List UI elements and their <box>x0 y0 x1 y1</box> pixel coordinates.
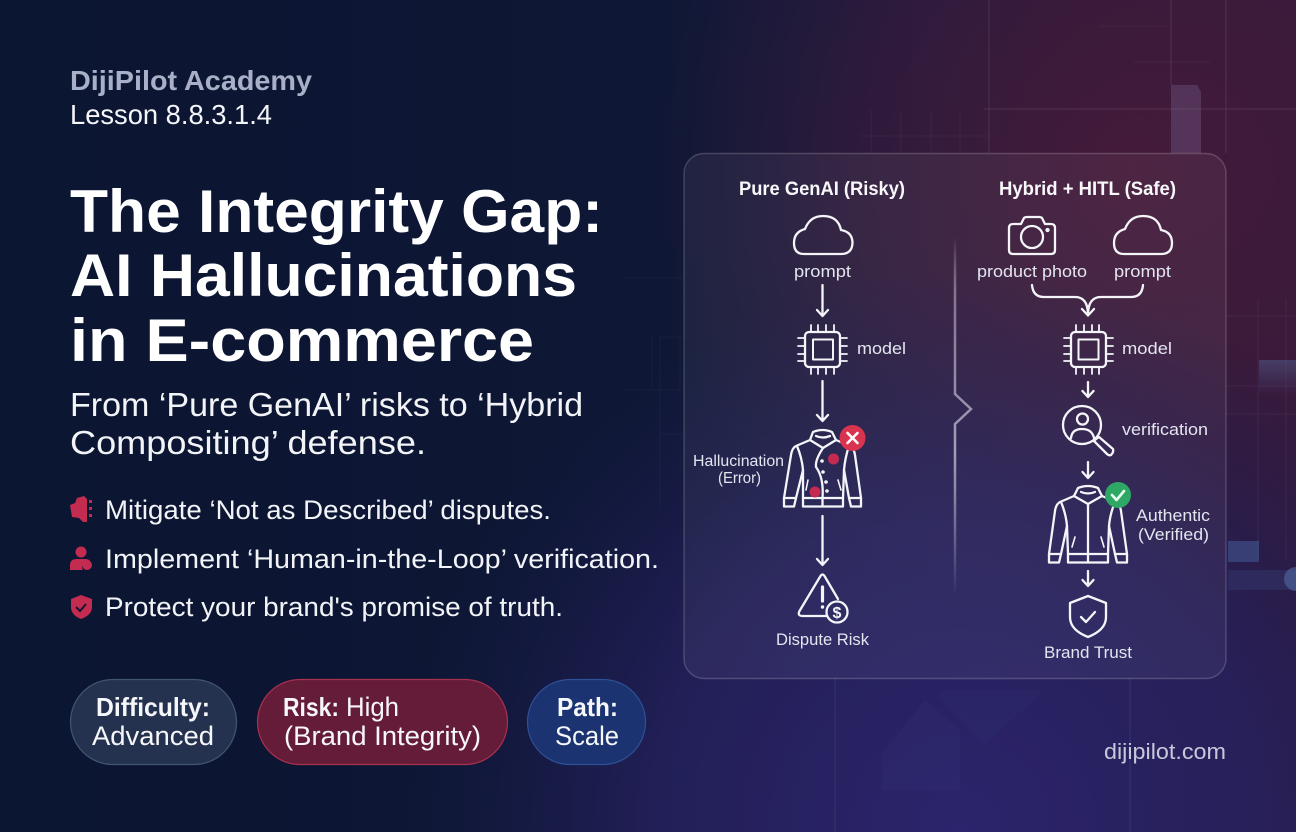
label: prompt: prompt <box>1114 262 1171 281</box>
title: The Integrity Gap: <box>70 178 603 245</box>
label: authentic: (Verified) <box>1138 525 1209 544</box>
arrow <box>817 285 828 316</box>
label: hallucination: Hallucination <box>693 453 784 470</box>
bullet: brand promise: Protect your brand's promise of truth. <box>105 592 563 622</box>
pill: difficulty: Advanced <box>92 721 214 751</box>
label: dispute risk: Dispute Risk <box>776 630 869 649</box>
label: prompt: prompt <box>794 262 851 281</box>
column: pure genai <box>693 178 906 649</box>
arrow <box>817 516 828 565</box>
pill: difficulty: Difficulty: <box>96 692 210 722</box>
icon: flawed jacket <box>784 425 866 506</box>
title: in E-commerce <box>70 307 534 374</box>
icon: cloud <box>1114 216 1172 254</box>
icon: chip <box>1064 325 1113 374</box>
icon: verification magnifier <box>1063 406 1113 455</box>
subtitle: From ‘Pure GenAI’ risks to ‘Hybrid <box>70 386 583 423</box>
arrow <box>1082 462 1094 478</box>
label: product photo: product photo <box>977 262 1087 281</box>
arrow: merge bracket <box>1032 285 1143 316</box>
title <box>70 178 603 374</box>
arrow <box>817 381 828 421</box>
icon: trust shield <box>1070 596 1106 637</box>
heading: hybrid: Hybrid + HITL (Safe) <box>999 178 1176 200</box>
label: authentic: Authentic <box>1136 506 1211 525</box>
pill: path <box>528 680 646 764</box>
icon: warning with dollar: $ <box>833 605 842 622</box>
header: academy and lesson: DijiPilot Academy <box>70 65 312 96</box>
label: brand trust: Brand Trust <box>1044 643 1132 662</box>
website url: dijipilot.com <box>1104 739 1226 764</box>
arrow <box>1082 382 1094 397</box>
icon: cloud <box>794 216 852 254</box>
arrow <box>1082 571 1094 586</box>
label: authentic <box>1136 506 1211 544</box>
divider chevron <box>955 237 971 596</box>
label: hallucination: (Error) <box>718 470 761 487</box>
pill: path: Path: <box>557 692 618 722</box>
pill: difficulty <box>70 680 236 764</box>
header: academy and lesson: Lesson 8.8.3.1.4 <box>70 99 272 130</box>
pill: risk: (Brand Integrity) <box>284 721 481 751</box>
icon: camera <box>1009 217 1055 254</box>
heading: pure genai: Pure GenAI (Risky) <box>739 178 905 200</box>
icon: dispute megaphone <box>70 496 92 522</box>
subtitle <box>70 386 583 461</box>
header: academy and lesson <box>70 65 312 130</box>
icon: chip <box>798 325 847 374</box>
bullet: disputes: Mitigate ‘Not as Described’ disputes. <box>105 495 551 525</box>
pill: risk: High <box>346 692 399 722</box>
label: verification: verification <box>1122 420 1208 439</box>
title: AI Hallucinations <box>70 242 577 309</box>
icon: person with badge <box>70 546 92 570</box>
icon: warning with dollar <box>799 574 848 622</box>
pill: path: Scale <box>555 721 619 751</box>
bullet: human in the loop: Implement ‘Human-in-the-Loop’ verification. <box>105 544 659 574</box>
panel: comparison <box>684 154 1226 678</box>
column: hybrid <box>977 178 1211 662</box>
bullet list <box>70 495 659 622</box>
subtitle: Compositing’ defense. <box>70 424 426 461</box>
label: model: model <box>857 339 906 358</box>
pill: risk <box>258 680 508 764</box>
pill: risk: Risk: <box>283 692 339 722</box>
icon: authentic jacket <box>1049 482 1131 562</box>
label: hallucination <box>693 453 784 487</box>
icon: shield check <box>71 595 92 619</box>
label: model: model <box>1122 339 1172 358</box>
